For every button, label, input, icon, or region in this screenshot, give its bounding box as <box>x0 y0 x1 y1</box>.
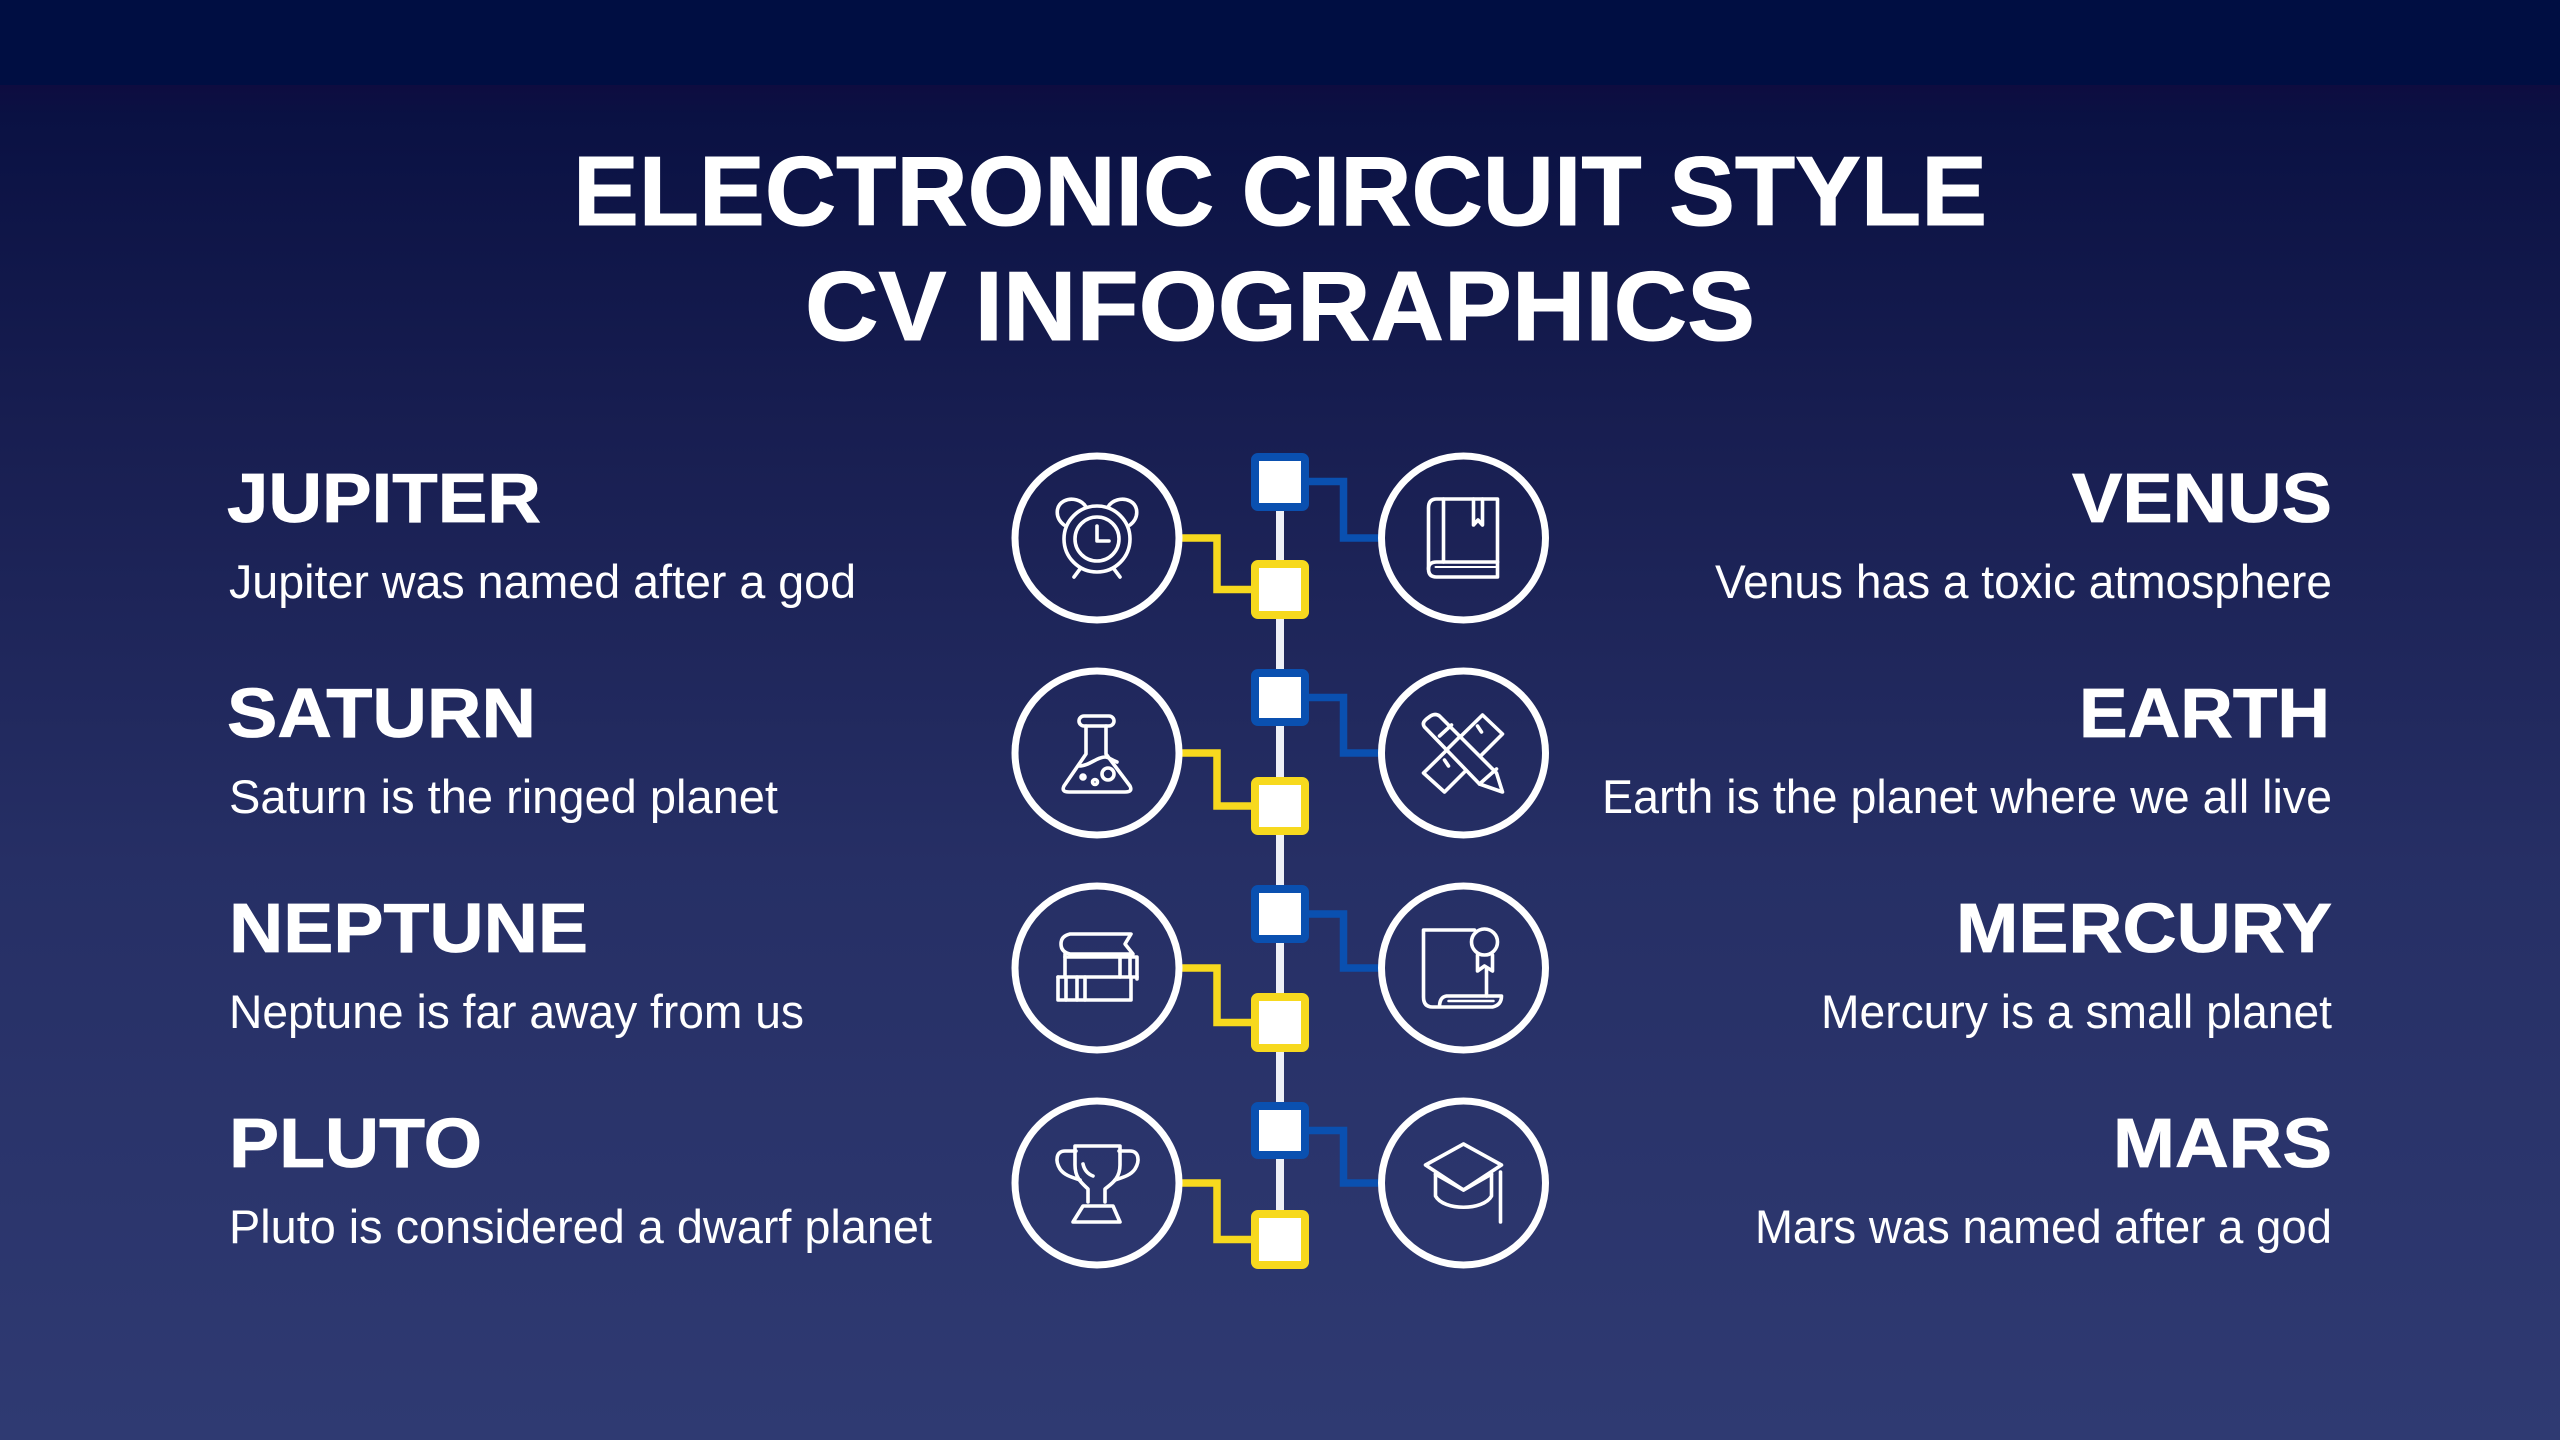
text block: Jupiter: Jupiter was named after a god <box>229 555 856 608</box>
title: CV INFOGRAPHICS <box>805 251 1755 361</box>
connector: Saturn yellow <box>1181 753 1255 806</box>
connector: Mercury blue <box>1305 914 1379 968</box>
icon: book <box>1382 456 1546 620</box>
text block: Pluto <box>229 1104 932 1253</box>
text block: Venus <box>1715 459 2332 608</box>
node: Venus blue <box>1255 457 1305 507</box>
connector: Jupiter yellow <box>1181 538 1255 590</box>
text block: Earth <box>1602 674 2332 823</box>
icon: stack of books <box>1015 886 1179 1050</box>
icon: trophy <box>1015 1101 1179 1265</box>
text block: Saturn: Saturn is the ringed planet <box>229 770 778 823</box>
title: ELECTRONIC CIRCUIT STYLE <box>573 136 1987 246</box>
connector: Mars blue <box>1305 1130 1379 1183</box>
text block: Earth: EARTH <box>2079 674 2330 752</box>
icon: flask <box>1015 671 1179 835</box>
text block: Pluto: Pluto is considered a dwarf planet <box>229 1200 932 1253</box>
text block: Earth: Earth is the planet where we all live <box>1602 770 2332 823</box>
node: Pluto yellow <box>1255 1214 1305 1265</box>
text block: Venus: Venus has a toxic atmosphere <box>1715 555 2332 608</box>
text block: Venus: VENUS <box>2072 459 2332 537</box>
text block: Mars: Mars was named after a god <box>1755 1200 2332 1253</box>
icon: diploma scroll <box>1382 886 1546 1050</box>
icon: graduation cap <box>1382 1101 1546 1265</box>
text block: Neptune: NEPTUNE <box>229 889 588 967</box>
connector: Pluto yellow <box>1181 1183 1255 1240</box>
text block: Mercury <box>1821 889 2332 1038</box>
circuit spine <box>1276 481 1284 1239</box>
node: Mercury blue <box>1255 889 1305 939</box>
text block: Jupiter <box>227 459 856 608</box>
text block: Saturn <box>227 674 778 823</box>
connector: Earth blue <box>1305 698 1379 753</box>
node: Neptune yellow <box>1255 997 1305 1048</box>
connector: Venus blue <box>1305 482 1379 538</box>
text block: Neptune <box>229 889 804 1038</box>
icon: alarm clock <box>1015 456 1179 620</box>
icon: pencil and ruler <box>1382 671 1546 835</box>
connector: Neptune yellow <box>1181 968 1255 1022</box>
text block: Neptune: Neptune is far away from us <box>229 985 804 1038</box>
text block: Mars <box>1755 1104 2332 1253</box>
text block: Mercury: MERCURY <box>1956 889 2332 967</box>
text block: Jupiter: JUPITER <box>227 459 541 537</box>
node: Mars blue <box>1255 1106 1305 1155</box>
text block: Saturn: SATURN <box>227 674 536 752</box>
text block: Mars: MARS <box>2113 1104 2332 1182</box>
node: Earth blue <box>1255 673 1305 722</box>
title <box>573 136 1987 361</box>
node: Saturn yellow <box>1255 781 1305 831</box>
text block: Mercury: Mercury is a small planet <box>1821 985 2332 1038</box>
node: Jupiter yellow <box>1255 564 1305 615</box>
text block: Pluto: PLUTO <box>229 1104 482 1182</box>
